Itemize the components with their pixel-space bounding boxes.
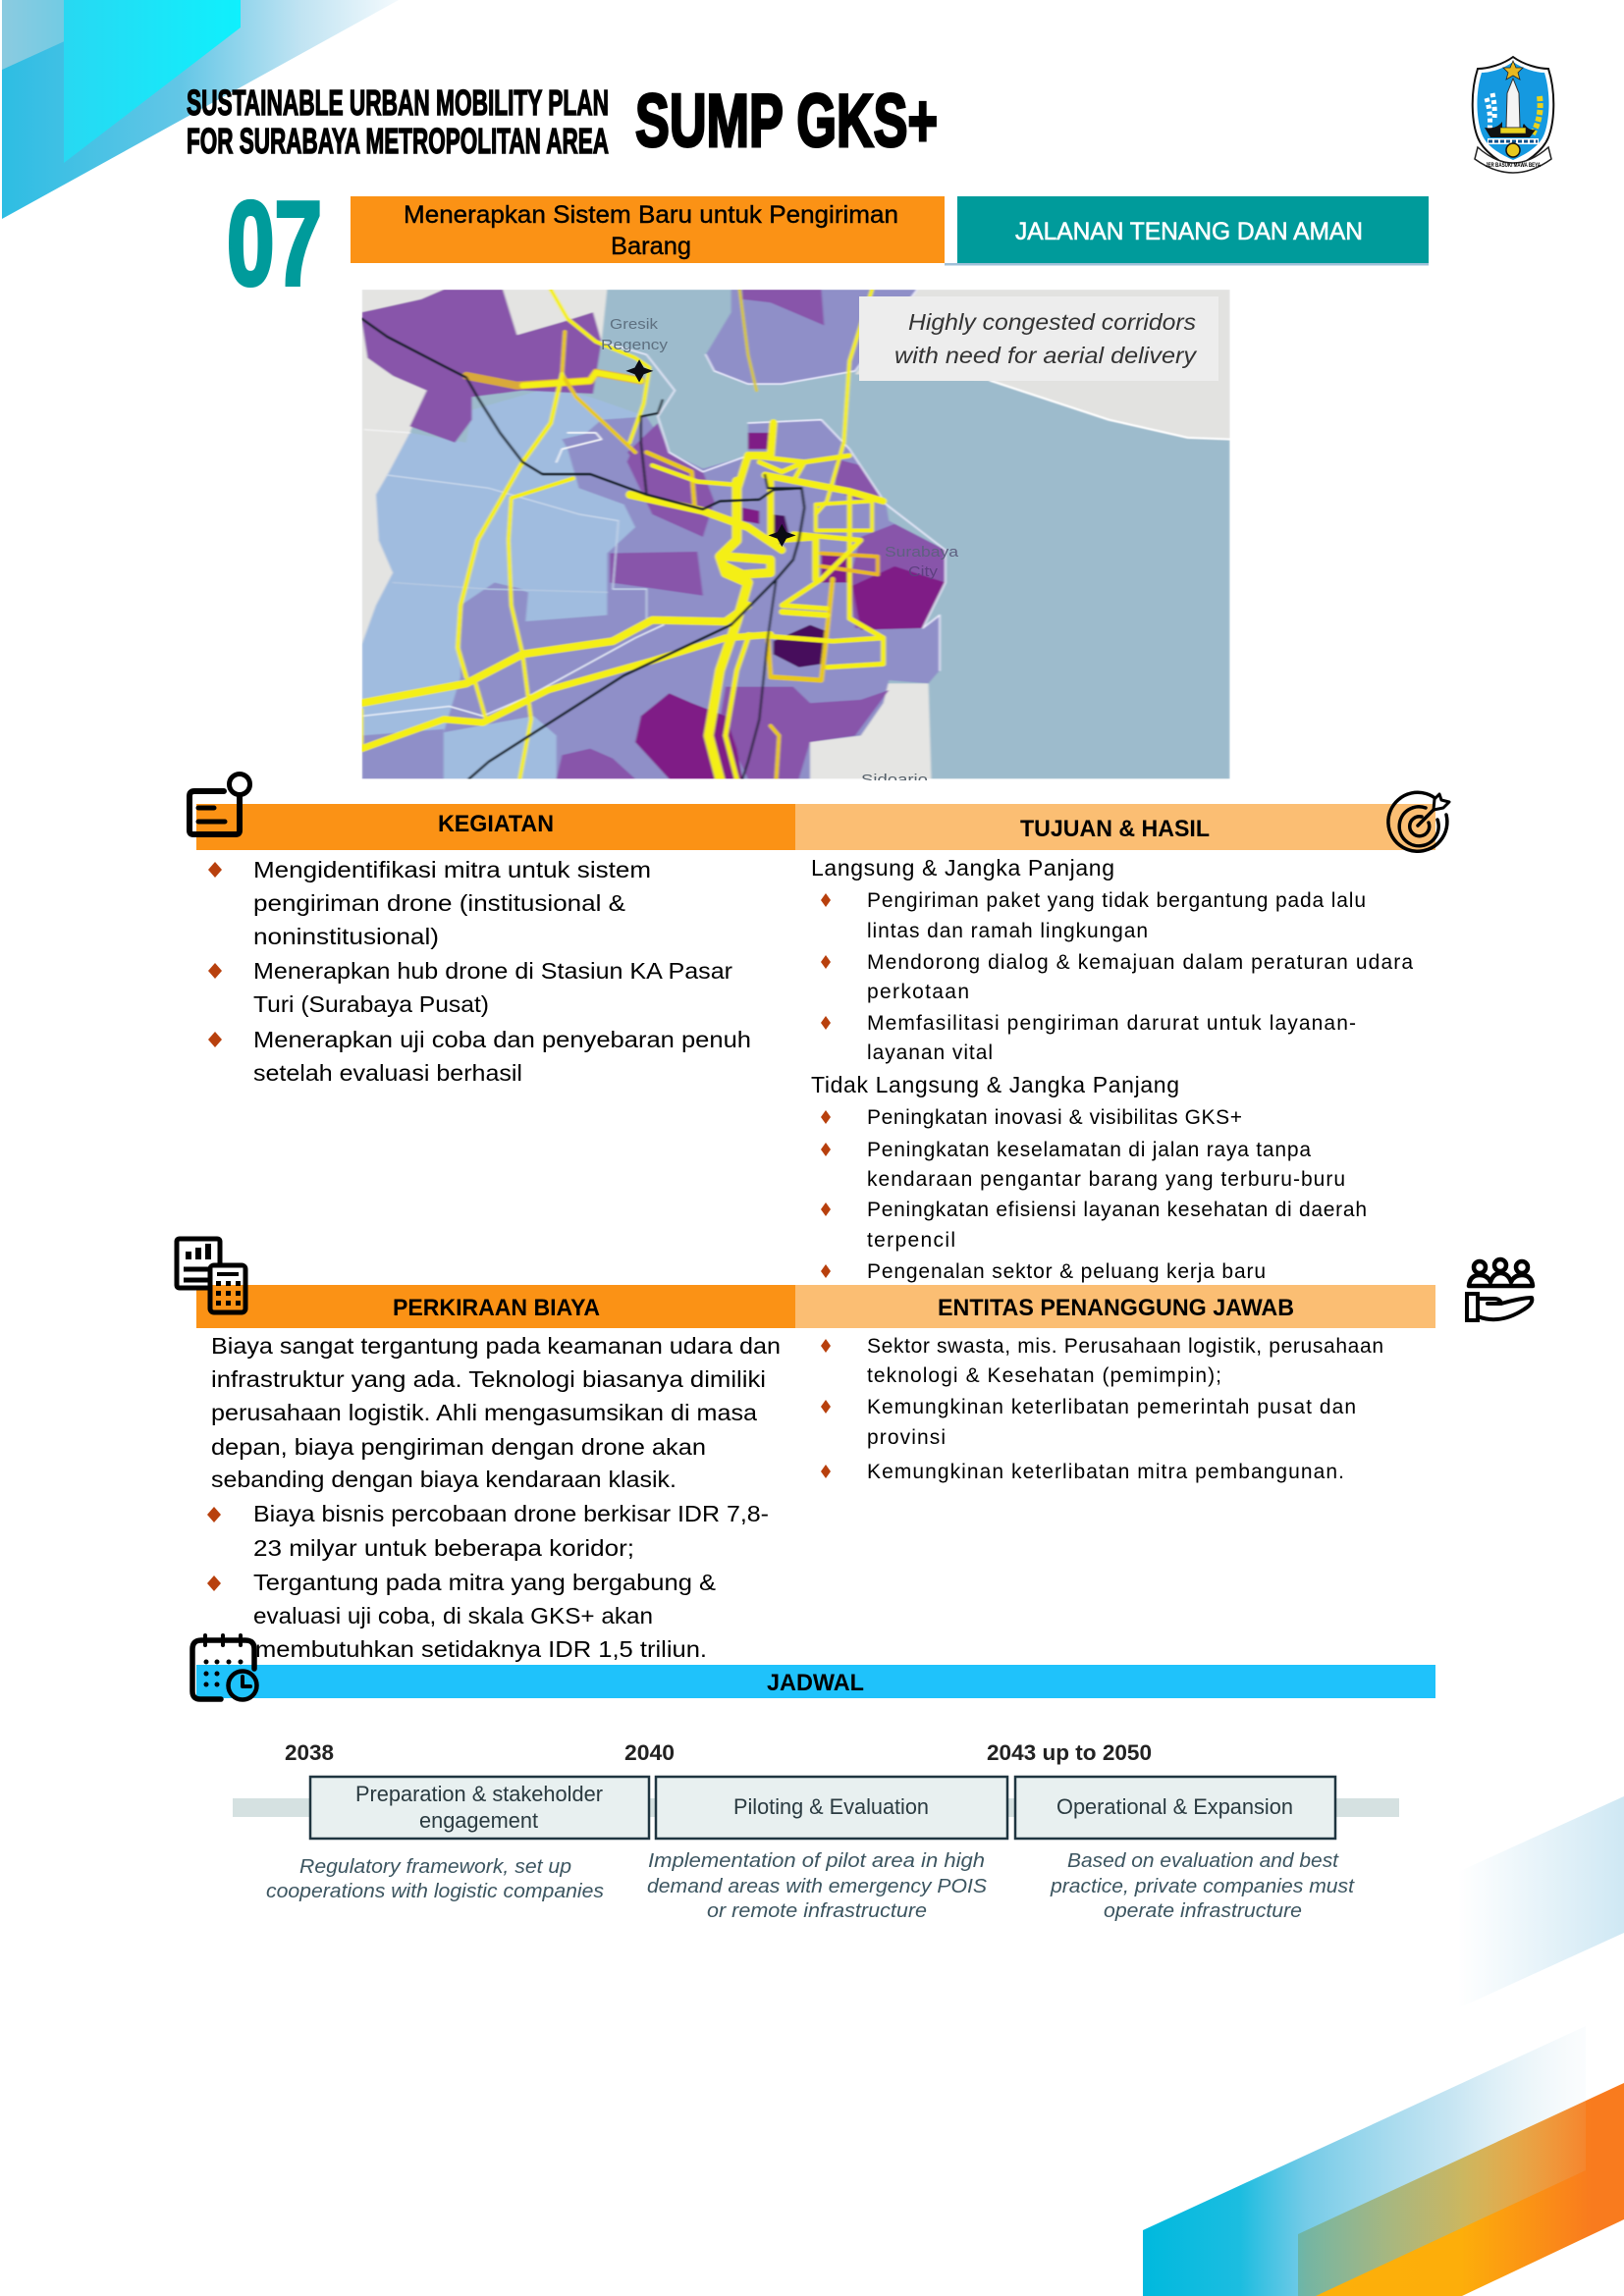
text block: cost estimate: perusahaan logistik. Ahli mengasumsikan di masa: [211, 1400, 757, 1425]
list: kegiatan items: Menerapkan uji coba dan penyebaran penuh: [253, 1027, 751, 1052]
header title: FOR SURABAYA METROPOLITAN AREA: [187, 121, 609, 161]
header title: [187, 80, 938, 163]
category box: teal: [945, 196, 1429, 265]
list: indirect and long term outcomes: Peningkatan inovasi & visibilitas GKS+: [867, 1106, 1242, 1129]
icon: calendar with clock: [192, 1635, 257, 1700]
text block: cost estimate: Biaya bisnis percobaan drone berkisar IDR 7,8-: [253, 1501, 769, 1526]
timeline note 1: Regulatory framework, set up: [299, 1856, 571, 1878]
list: kegiatan items: noninstitusional): [253, 924, 439, 949]
list: kegiatan items: [208, 857, 751, 1086]
icon: report and calculator: [177, 1239, 245, 1312]
icon: East Java coat of arms logo: [1473, 57, 1553, 173]
list: direct and long term outcomes: Memfasilitasi pengiriman darurat untuk layanan-: [867, 1012, 1356, 1035]
timeline note 3: practice, private companies must: [1050, 1876, 1356, 1897]
timeline note 3: operate infrastructure: [1104, 1900, 1302, 1922]
list: indirect and long term outcomes: kendaraan pengantar barang yang terburu-buru: [867, 1168, 1345, 1191]
icon: East Java coat of arms logo: JER BASUKI MAWA BEYA: [1486, 163, 1541, 169]
list: responsible entities: Kemungkinan keterlibatan mitra pembangunan.: [867, 1461, 1344, 1483]
list: direct and long term outcomes: Pengiriman paket yang tidak bergantung pada lalu: [867, 889, 1366, 912]
number 07: 07: [227, 177, 322, 310]
heading: entitas penanggung jawab: [795, 1285, 1435, 1328]
timeline stage 3: Operational & Expansion: [1056, 1794, 1293, 1819]
timeline years: 2040: [624, 1740, 675, 1765]
timeline note 2: or remote infrastructure: [707, 1900, 927, 1922]
heading: tujuan dan hasil: [795, 804, 1435, 850]
header title: SUSTAINABLE URBAN MOBILITY PLAN: [187, 82, 609, 123]
timeline years: 2043 up to 2050: [987, 1740, 1152, 1765]
timeline stage 1: [310, 1777, 649, 1839]
list: responsible entities: provinsi: [867, 1426, 946, 1449]
list: kegiatan items: setelah evaluasi berhasil: [253, 1060, 522, 1086]
panel: jadwal: [192, 1635, 1435, 1922]
icon: activity card: [189, 774, 249, 834]
title box: orange: [351, 196, 945, 263]
heading: jadwal: JADWAL: [767, 1670, 864, 1696]
list: direct and long term outcomes: layanan vital: [867, 1041, 993, 1064]
text block: cost estimate: Tergantung pada mitra yang bergabung &: [253, 1570, 716, 1595]
map place labels: City: [908, 563, 939, 580]
panel: perkiraan biaya: [177, 1239, 795, 1662]
list: responsible entities: [821, 1335, 1383, 1483]
list: indirect and long term outcomes: Tidak Langsung & Jangka Panjang: [811, 1072, 1179, 1097]
timeline stage 2: Piloting & Evaluation: [733, 1794, 929, 1819]
map marker stars: [625, 359, 796, 547]
header title: SUMP GKS+: [635, 80, 938, 163]
timeline stage 1: Preparation & stakeholder: [355, 1782, 603, 1806]
map place labels: Surabaya: [885, 544, 959, 561]
list: direct and long term outcomes: lintas dan ramah lingkungan: [867, 920, 1148, 942]
text block: cost estimate: membutuhkan setidaknya IDR 1,5 triliun.: [255, 1636, 707, 1662]
map place labels: [601, 316, 959, 788]
map caption: [859, 296, 1218, 381]
list: responsible entities: Sektor swasta, mis. Perusahaan logistik, perusahaan: [867, 1335, 1383, 1358]
text block: cost estimate: [207, 1333, 781, 1662]
list: kegiatan items: pengiriman drone (institusional &: [253, 890, 625, 916]
heading: tujuan dan hasil: TUJUAN & HASIL: [1020, 816, 1210, 842]
list: indirect and long term outcomes: Pengenalan sektor & peluang kerja baru: [867, 1260, 1266, 1283]
icon: target: [1388, 792, 1449, 851]
timeline stage 3: [1015, 1777, 1335, 1839]
timeline axis band: [233, 1798, 1399, 1817]
map place labels: Gresik: [610, 316, 659, 333]
heading: jadwal: [196, 1665, 1435, 1698]
text block: cost estimate: sebanding dengan biaya kendaraan klasik.: [211, 1467, 677, 1492]
heading: perkiraan biaya: [196, 1285, 795, 1328]
timeline note 3: Based on evaluation and best: [1067, 1850, 1339, 1872]
list: direct and long term outcomes: Mendorong dialog & kemajuan dalam peraturan udara: [867, 951, 1413, 974]
map place labels: Sidoarjo: [861, 772, 928, 788]
map caption: Highly congested corridors: [908, 309, 1197, 335]
timeline note 1: [266, 1856, 604, 1902]
panel: tujuan dan hasil: [795, 792, 1449, 1283]
list: indirect and long term outcomes: terpencil: [867, 1229, 955, 1252]
title box: orange: Barang: [611, 233, 691, 260]
heading: kegiatan: [196, 804, 795, 850]
list: indirect and long term outcomes: Peningkatan efisiensi layanan kesehatan di daerah: [867, 1199, 1367, 1221]
list: direct and long term outcomes: Langsung & Jangka Panjang: [811, 855, 1114, 881]
timeline years: [285, 1740, 1152, 1765]
category box: teal: JALANAN TENANG DAN AMAN: [1015, 218, 1363, 245]
timeline note 3: [1050, 1850, 1356, 1922]
text block: cost estimate: depan, biaya pengiriman dengan drone akan: [211, 1434, 706, 1460]
list: kegiatan items: Mengidentifikasi mitra untuk sistem: [253, 857, 651, 882]
timeline stage 2: [656, 1777, 1007, 1839]
list: responsible entities: Kemungkinan keterlibatan pemerintah pusat dan: [867, 1396, 1356, 1418]
heading: perkiraan biaya: PERKIRAAN BIAYA: [393, 1295, 600, 1321]
timeline stage 1: engagement: [419, 1808, 538, 1833]
text block: cost estimate: Biaya sangat tergantung pada keamanan udara dan: [211, 1333, 781, 1359]
map caption: with need for aerial delivery: [894, 343, 1198, 368]
list: direct and long term outcomes: [811, 855, 1413, 1064]
timeline note 1: cooperations with logistic companies: [266, 1881, 604, 1902]
text block: cost estimate: evaluasi uji coba, di skala GKS+ akan: [253, 1603, 653, 1629]
panel: kegiatan: [189, 774, 795, 1086]
title box: orange: Menerapkan Sistem Baru untuk Pengiriman: [404, 201, 898, 229]
heading: kegiatan: KEGIATAN: [438, 811, 554, 837]
decoration: bottom-right gradient bands: [1143, 1796, 1624, 2296]
heading: entitas penanggung jawab: ENTITAS PENANGGUNG JAWAB: [938, 1295, 1294, 1321]
list: responsible entities: teknologi & Kesehatan (pemimpin);: [867, 1364, 1221, 1387]
list: indirect and long term outcomes: [811, 1072, 1367, 1283]
text block: cost estimate: infrastruktur yang ada. Teknologi biasanya dimiliki: [211, 1366, 766, 1392]
list: direct and long term outcomes: perkotaan: [867, 981, 969, 1003]
list: indirect and long term outcomes: Peningkatan keselamatan di jalan raya tanpa: [867, 1139, 1311, 1161]
map place labels: Regency: [601, 337, 669, 353]
decoration: top-left gradient bands: [2, 0, 399, 219]
list: kegiatan items: Turi (Surabaya Pusat): [253, 991, 489, 1017]
text block: cost estimate: 23 milyar untuk beberapa koridor;: [253, 1535, 634, 1561]
list: kegiatan items: Menerapkan hub drone di Stasiun KA Pasar: [253, 958, 732, 984]
map: congested corridors: [362, 290, 1230, 788]
timeline note 2: Implementation of pilot area in high: [648, 1850, 985, 1872]
timeline note 2: [647, 1850, 988, 1922]
panel: entitas penanggung jawab: [795, 1259, 1533, 1483]
timeline years: 2038: [285, 1740, 334, 1765]
timeline note 2: demand areas with emergency POIS: [647, 1876, 988, 1897]
icon: people on a hand: [1467, 1259, 1533, 1320]
